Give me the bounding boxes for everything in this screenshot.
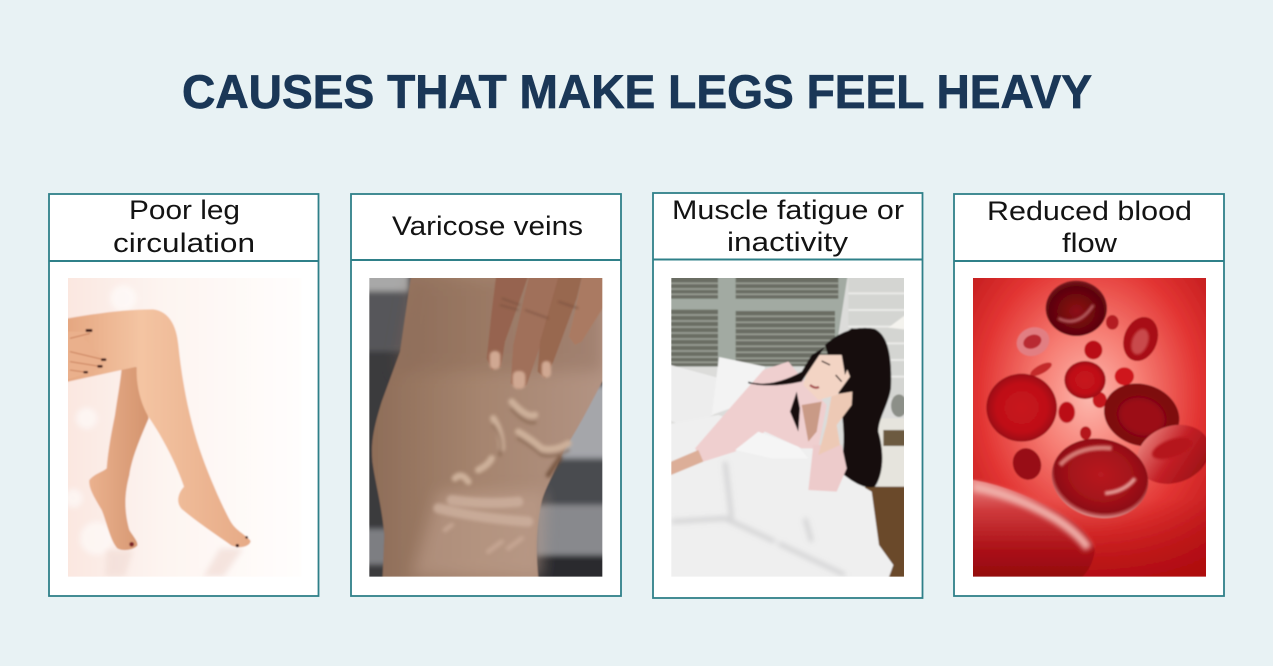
card frame (653, 193, 922, 598)
label: poor leg circulation: circulation (113, 228, 255, 258)
card frame (49, 194, 318, 596)
label: varicose veins: Varicose veins (392, 211, 583, 241)
header divider (351, 259, 621, 261)
label: poor leg circulation: Poor leg (129, 195, 240, 225)
nails (83, 329, 248, 547)
bulging veins (438, 402, 568, 552)
foreground cell right edge (1138, 424, 1206, 484)
lamp and nightstand (890, 316, 904, 330)
large red cell right (1103, 382, 1180, 447)
panel: varicose veins (351, 194, 621, 596)
label: muscle fatigue or inactivity: Muscle fatigue or (672, 195, 904, 225)
label: muscle fatigue or inactivity: inactivity (727, 227, 849, 257)
arm and face (671, 450, 704, 476)
medium cells (1064, 361, 1106, 399)
panel: reduced blood flow (954, 194, 1224, 596)
infographic canvas (48, 74, 1225, 599)
hair back (825, 328, 891, 487)
label: reduced blood flow (987, 196, 1192, 258)
photo: crossed bare legs (68, 278, 252, 576)
label: muscle fatigue or inactivity (672, 195, 904, 257)
card frame (954, 194, 1224, 596)
hand (486, 278, 528, 370)
large dark cell top (1046, 281, 1107, 336)
label: reduced blood flow: Reduced blood (987, 196, 1192, 226)
header divider (653, 258, 922, 260)
label: poor leg circulation (113, 195, 255, 258)
panel: poor leg circulation (49, 194, 318, 596)
label: reduced blood flow: flow (1062, 228, 1118, 258)
header divider (49, 260, 318, 262)
bed and pillows (671, 364, 716, 423)
small cells (1106, 315, 1119, 330)
pajama (695, 362, 827, 462)
photo: leg with varicose veins (363, 271, 609, 583)
header divider (954, 260, 1224, 262)
foreground cell bottom left (973, 478, 1095, 576)
shutters (665, 271, 848, 367)
photo: tired woman in bed (665, 271, 911, 583)
title: CAUSES THAT MAKE LEGS FEEL HEAVY (182, 65, 1092, 118)
foreground cell centre (1051, 438, 1149, 519)
card frame (351, 194, 621, 596)
large red cell left (986, 374, 1057, 442)
panel: muscle fatigue or inactivity (653, 193, 922, 598)
photo: red blood cells (973, 278, 1206, 577)
